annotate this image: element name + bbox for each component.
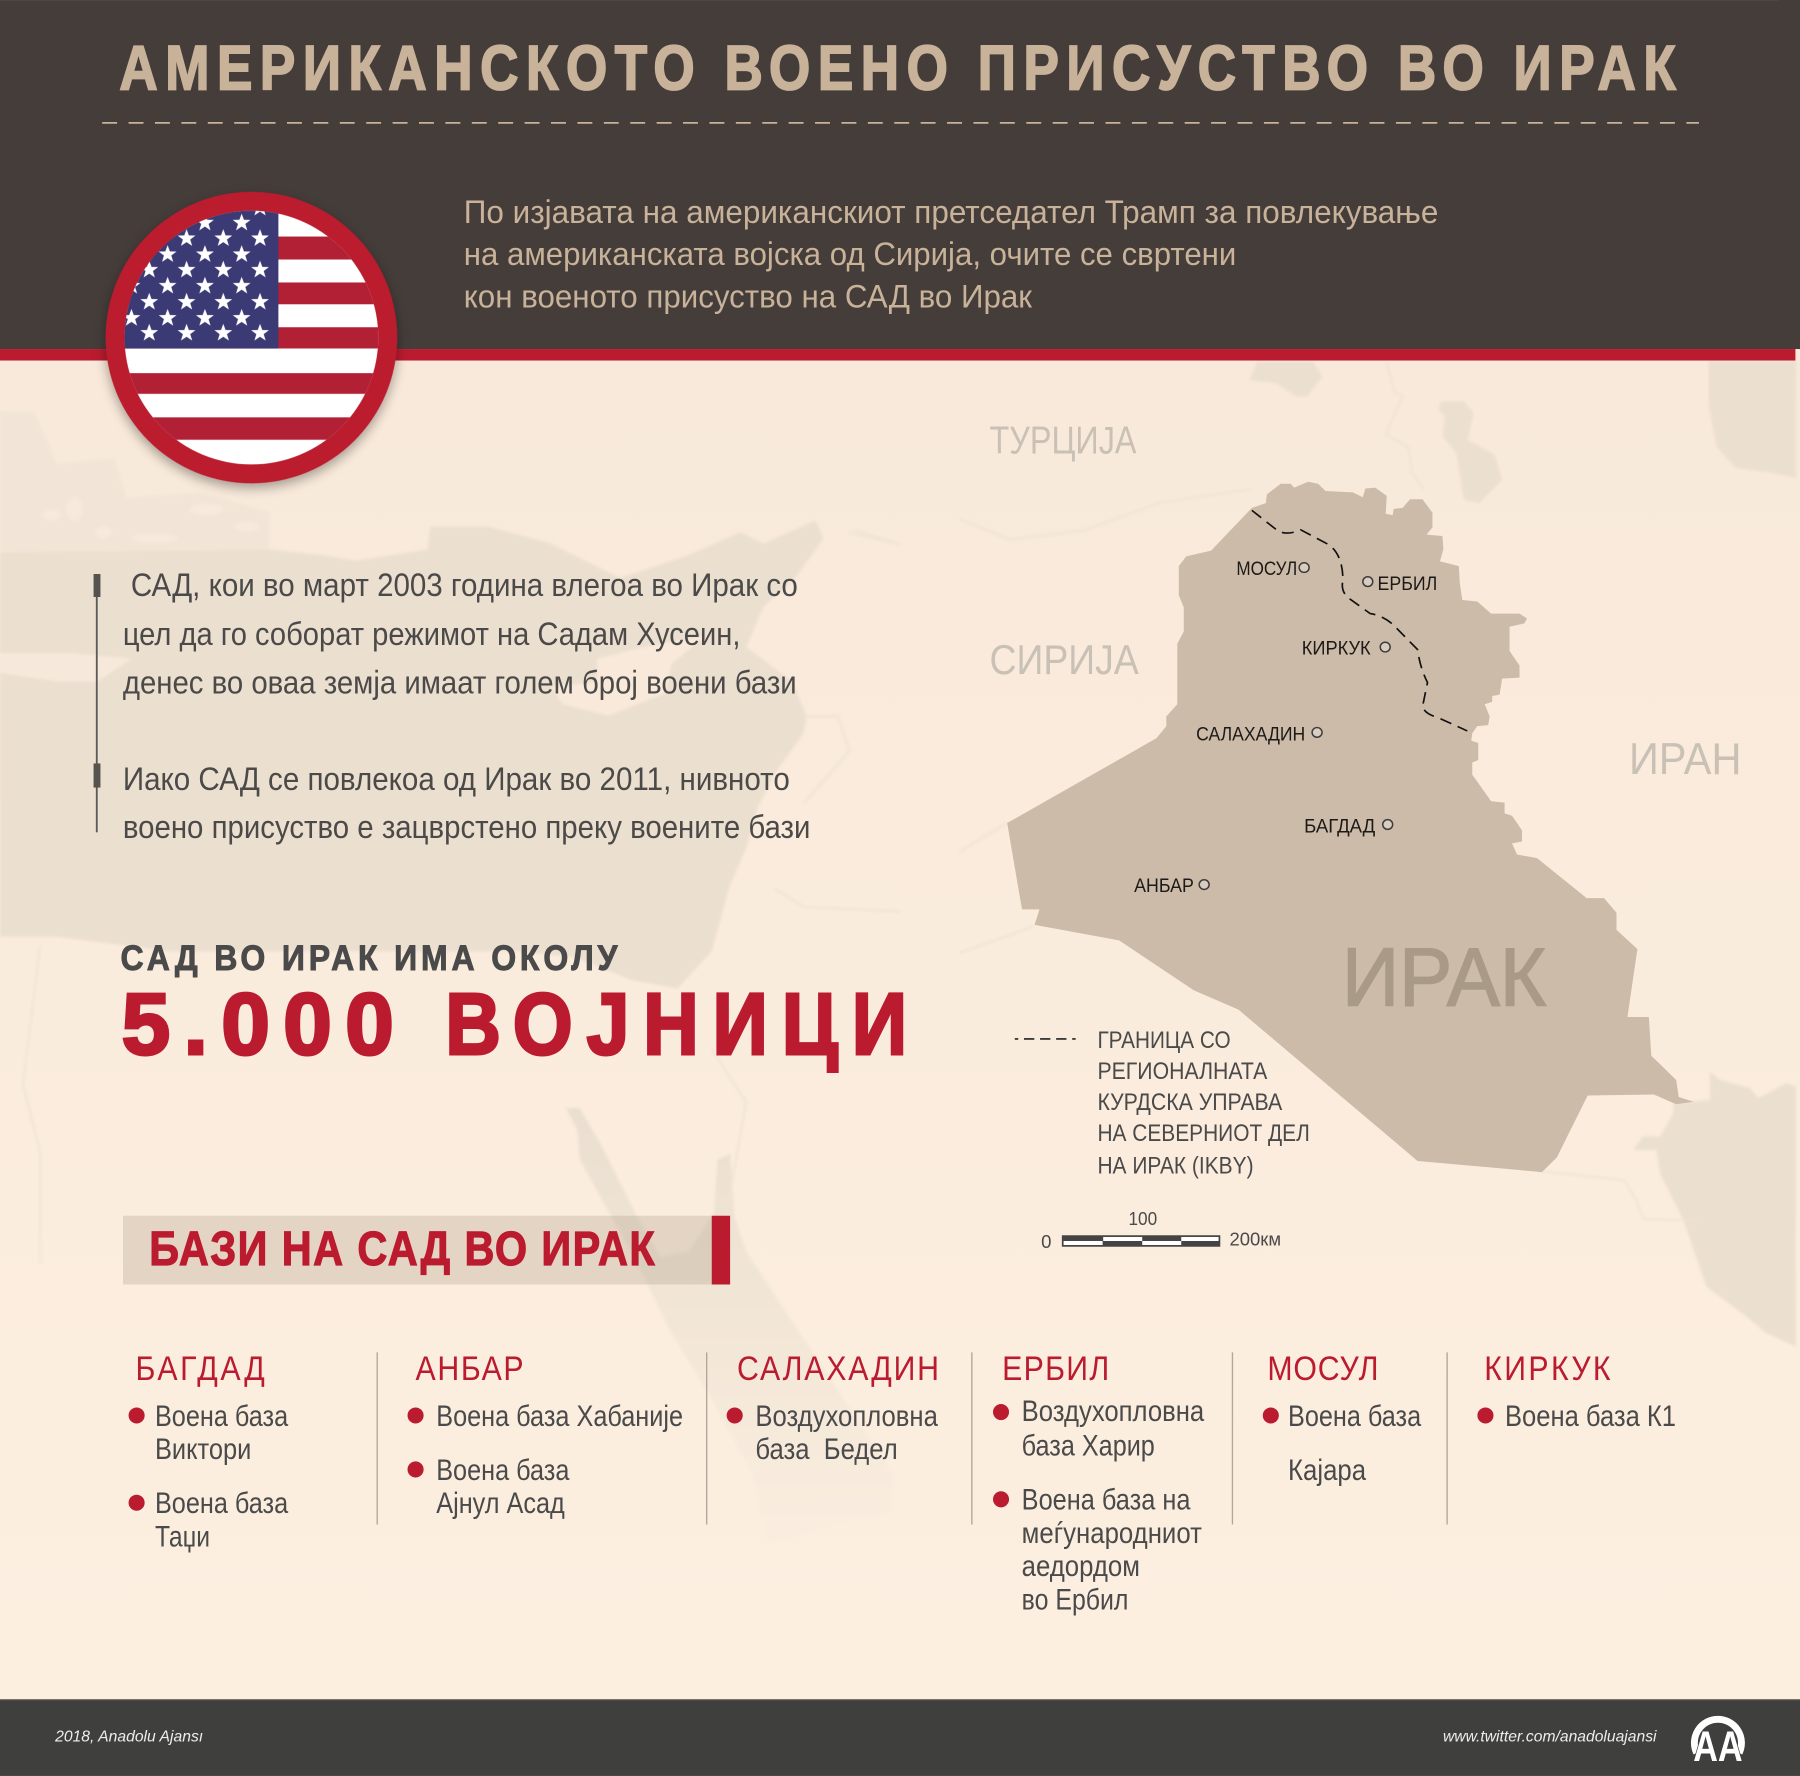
column: Baghdad: Таџи xyxy=(155,1521,210,1553)
column: Mosul xyxy=(1263,1349,1422,1487)
text block with timeline: воено присуство е зацврстено преку воените бази xyxy=(123,809,810,845)
title: АМЕРИКАНСКОТО ВОЕНО ПРИСУСТВО ВО ИРАК xyxy=(119,33,1676,104)
column: Baghdad: Виктори xyxy=(155,1434,251,1466)
text block with timeline: денес во оваа земја имаат голем број воени бази xyxy=(123,664,797,700)
column: Anbar: Ајнул Асад xyxy=(436,1488,565,1520)
intro text: кон военото присуство на САД во Ирак xyxy=(464,279,1033,315)
panel: bases heading: БАЗИ НА САД ВО ИРАК xyxy=(149,1221,655,1276)
map of Iraq xyxy=(1007,482,1694,1172)
column: Anbar: АНБАР xyxy=(416,1349,524,1387)
column: Mosul: МОСУЛ xyxy=(1267,1349,1378,1387)
column: Baghdad: БАГДАД xyxy=(135,1349,265,1387)
scale bar: 200км xyxy=(1229,1229,1281,1250)
scale bar xyxy=(1041,1208,1281,1252)
text block with timeline: цел да го соборат режимот на Садам Хусеин, xyxy=(123,616,740,652)
column: Baghdad: Воена база xyxy=(155,1488,289,1520)
map of Iraq: ИРАК xyxy=(1342,931,1546,1024)
stat: 5,000 soldiers xyxy=(122,976,907,1073)
stat: 5,000 soldiers: ВОЈНИЦИ xyxy=(445,976,907,1073)
icon: Anadolu Agency logo: AA xyxy=(1693,1723,1743,1770)
stat lead-in: САД ВО ИРАК ИМА ОКОЛУ xyxy=(121,939,618,978)
column: Anbar: Воена база xyxy=(436,1455,570,1487)
scale bar: 100 xyxy=(1128,1208,1157,1229)
column: Erbil xyxy=(993,1349,1205,1616)
country labels: ИРАН xyxy=(1629,734,1741,784)
column: Baghdad: Воена база xyxy=(155,1401,289,1433)
column: Salahaddin: база Бедел xyxy=(755,1434,898,1466)
country labels xyxy=(990,419,1741,784)
column: Erbil: база Харир xyxy=(1022,1431,1155,1463)
column: Mosul: Воена база xyxy=(1288,1401,1422,1433)
column: Erbil: Воздухопловна xyxy=(1022,1396,1205,1428)
column: Erbil: ЕРБИЛ xyxy=(1002,1349,1109,1387)
text block with timeline: САД, кои во март 2003 година влегоа во Ирак со xyxy=(131,567,798,603)
map of Iraq: КИРКУК xyxy=(1302,637,1371,659)
map legend: НА ИРАК (IKBY) xyxy=(1097,1152,1254,1179)
intro text: на американската војска од Сирија, очите се свртени xyxy=(464,236,1236,272)
map of Iraq: АНБАР xyxy=(1134,875,1194,897)
column: Erbil: Воена база на xyxy=(1022,1485,1191,1517)
map legend xyxy=(1015,1027,1310,1179)
map legend: РЕГИОНАЛНАТА xyxy=(1097,1058,1268,1085)
map legend: КУРДСКА УПРАВА xyxy=(1097,1089,1283,1116)
text block with timeline xyxy=(94,567,810,845)
map of Iraq: ЕРБИЛ xyxy=(1378,573,1437,595)
text block with timeline: Иако САД се повлекоа од Ирак во 2011, нивното xyxy=(123,761,790,797)
column: Mosul: Кајара xyxy=(1288,1455,1367,1487)
intro text: По изјавата на американскиот претседател Трамп за повлекување xyxy=(464,194,1438,230)
map of Iraq: МОСУЛ xyxy=(1236,558,1297,580)
column: Baghdad xyxy=(129,1349,289,1553)
column: Erbil: аедордом xyxy=(1022,1551,1140,1583)
column: Salahaddin xyxy=(727,1349,939,1466)
column: Kirkuk: Воена база К1 xyxy=(1505,1401,1676,1433)
footer band: 2018, Anadolu Ajansı xyxy=(54,1728,203,1746)
red rule xyxy=(0,349,1795,361)
column: Erbil: меѓународниот xyxy=(1022,1518,1202,1550)
country labels: ТУРЦИЈА xyxy=(990,419,1136,462)
stat: 5,000 soldiers: 5.000 xyxy=(122,976,394,1073)
background paper xyxy=(0,361,1800,1700)
intro text xyxy=(464,194,1438,315)
scale bar: 0 xyxy=(1041,1231,1052,1252)
icon: US flag badge xyxy=(106,192,397,483)
column: Anbar: Воена база Хабаније xyxy=(436,1401,683,1433)
footer band: www.twitter.com/anadoluajansi xyxy=(1443,1728,1657,1746)
footer band xyxy=(0,1699,1800,1776)
column: Erbil: во Ербил xyxy=(1022,1584,1128,1616)
map legend: НА СЕВЕРНИОТ ДЕЛ xyxy=(1097,1120,1310,1147)
map of Iraq: САЛАХАДИН xyxy=(1196,723,1305,745)
column: Salahaddin: Воздухопловна xyxy=(755,1401,939,1433)
background ghost map xyxy=(0,360,1796,1546)
column: Salahaddin: САЛАХАДИН xyxy=(737,1349,939,1387)
column: Kirkuk: КИРКУК xyxy=(1484,1349,1611,1387)
panel: bases heading xyxy=(123,1216,730,1285)
column: Anbar xyxy=(408,1349,683,1520)
panel: base columns xyxy=(129,1349,1676,1616)
map legend: ГРАНИЦА СО xyxy=(1097,1027,1231,1054)
header band xyxy=(0,0,1800,349)
map of Iraq: БАГДАД xyxy=(1304,815,1375,837)
column: Kirkuk xyxy=(1477,1349,1676,1433)
country labels: СИРИЈА xyxy=(990,637,1139,683)
